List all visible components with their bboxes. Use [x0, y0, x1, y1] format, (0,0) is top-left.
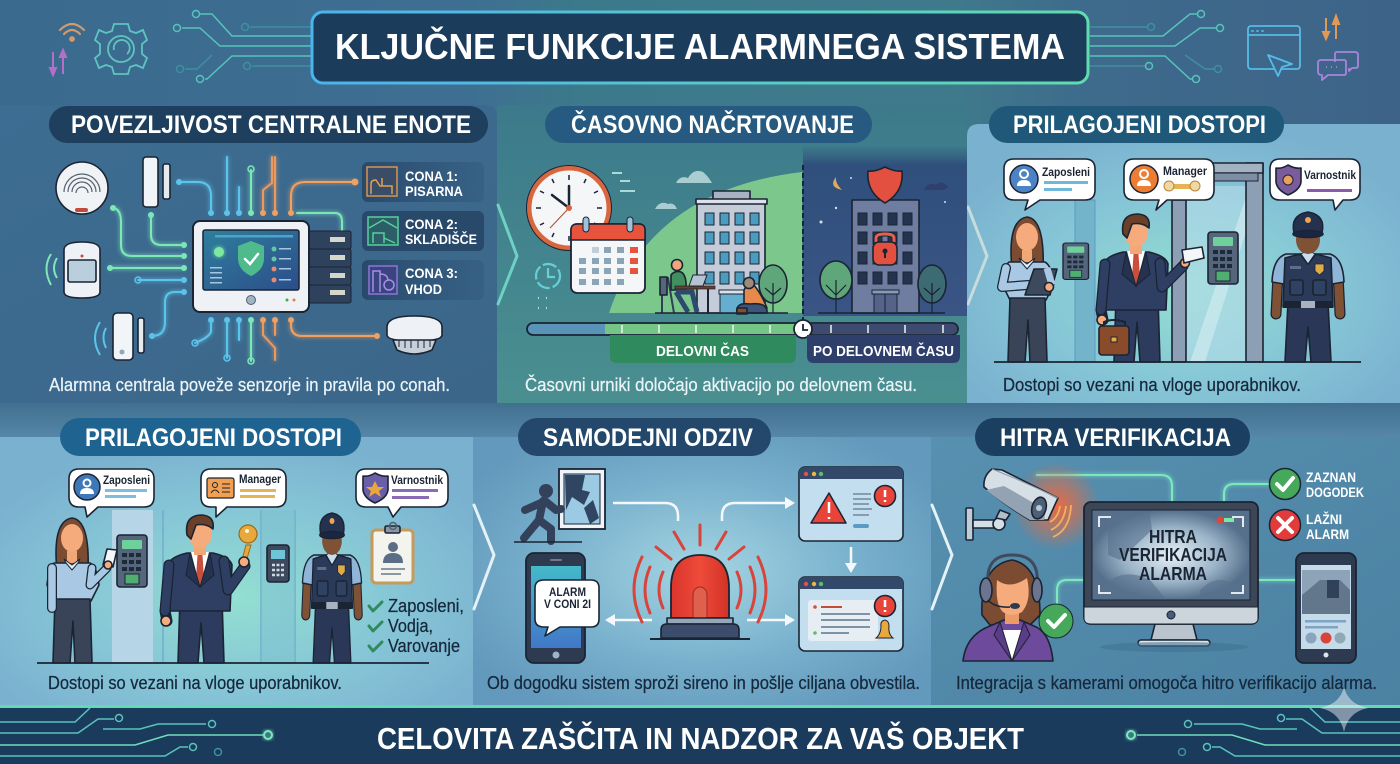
- icon: chat bubbles: [1318, 52, 1358, 80]
- bubble: guard: Varnostnik: [1304, 168, 1356, 182]
- panel: rapid verification background: [931, 437, 1400, 706]
- icon: motion sensor: [46, 242, 100, 298]
- title: KLJUČNE FUNKCIJE ALARMNEGA SISTEMA: [335, 25, 1065, 67]
- zone 2 label: CONA 2:: [405, 216, 458, 232]
- icon: ceiling smoke sensor: [387, 316, 442, 354]
- icon: seated person: [737, 278, 767, 314]
- bubble: guard second: Varnostnik: [391, 473, 443, 487]
- panel: connectivity of the central unit: [46, 106, 488, 395]
- timeline: [527, 323, 958, 335]
- panel: automatic response: [487, 418, 920, 693]
- icon: up and down arrows right: [1323, 16, 1339, 39]
- icon: detected event check: DOGODEK: [1306, 484, 1364, 500]
- label: working time: DELOVNI ČAS: [656, 342, 749, 360]
- icon: phone with message: V CONI 2I: [544, 599, 591, 611]
- zone 1 label: PISARNA: [405, 183, 463, 199]
- zone 3 label: CONA 3:: [405, 265, 458, 281]
- person: employee second: [47, 518, 117, 663]
- icon: monitor: ALARMA: [1139, 564, 1207, 584]
- bubble: manager: Manager: [1163, 164, 1207, 178]
- person: manager second: [161, 515, 257, 663]
- heading: scheduling: ČASOVNO NAČRTOVANJE: [571, 109, 854, 139]
- ground line: [37, 662, 429, 664]
- heading: rapid verification: [975, 418, 1250, 456]
- person: security guard: [1272, 212, 1344, 362]
- decorative clouds day: [612, 171, 712, 209]
- person: guard second: [302, 513, 362, 663]
- heading: custom access: [989, 106, 1284, 143]
- checklist: roles: Zaposleni,: [388, 596, 464, 616]
- icon: red shield: [868, 167, 902, 203]
- arrow: siren to notification: [747, 614, 795, 626]
- icon: burglar at window: [514, 469, 605, 542]
- connector lines: [1036, 475, 1297, 606]
- sensor wires: [110, 157, 377, 361]
- ground lines: [655, 312, 945, 314]
- panel: automatic response background: [473, 437, 931, 706]
- bubble: guard second: [356, 469, 448, 517]
- heading: custom access second: [60, 418, 361, 456]
- bubble: employee second: Zaposleni: [103, 473, 150, 487]
- arrow: alert to notification: [845, 547, 857, 573]
- zone 1 label: [362, 162, 484, 202]
- sparkle mark: [1320, 687, 1368, 732]
- heading: scheduling: [545, 106, 872, 143]
- icon: small timer: [536, 264, 560, 308]
- zone 3 label: VHOD: [405, 281, 442, 297]
- caption: Dostopi so vezani na vloge uporabnikov.: [1003, 375, 1301, 395]
- arrow: siren to phone: [605, 614, 652, 626]
- icon: keypad on gate: [1208, 232, 1238, 284]
- icon: detected event check: ZAZNAN: [1306, 469, 1356, 485]
- zone 2 label: SKLADIŠČE: [405, 230, 477, 247]
- icon: monitor: [1084, 502, 1258, 652]
- icon: up and down arrows left: [50, 50, 66, 75]
- heading: custom access: PRILAGOJENI DOSTOPI: [1013, 111, 1266, 139]
- caption: Časovni urniki določajo aktivacijo po delovnem času.: [525, 374, 917, 395]
- timeline handle: [794, 320, 812, 338]
- divider: [802, 165, 804, 320]
- icon: security camera: [966, 469, 1071, 540]
- caption: Integracija s kamerami omogoča hitro verifikacijo alarma.: [956, 673, 1377, 693]
- caption: Ob dogodku sistem sproži sireno in pošlje ciljana obvestila.: [487, 673, 920, 693]
- icon: phone camera feed: [1296, 553, 1356, 663]
- icon: keypad left: [117, 535, 147, 587]
- bubble: employee: Zaposleni: [1042, 165, 1090, 179]
- green day hill: [609, 172, 802, 313]
- header right circuit lines: [1090, 10, 1224, 82]
- bubble: manager: [1124, 159, 1214, 210]
- icon: padlock: [873, 234, 897, 265]
- row gap band: [0, 403, 1400, 439]
- heading: custom access second: PRILAGOJENI DOSTOPI: [85, 424, 342, 452]
- night sky details: [820, 177, 948, 224]
- wall band: [1075, 200, 1095, 362]
- icon: wifi: [60, 24, 84, 41]
- panel: custom access background: [967, 124, 1400, 403]
- icon: phone with message: ALARM: [549, 587, 586, 599]
- icon: server rack: [309, 231, 351, 303]
- icon: detected event check: [1270, 468, 1364, 500]
- icon: clock: [526, 166, 612, 250]
- bubble: employee: [1004, 159, 1095, 210]
- icon: false alarm cross: [1270, 510, 1349, 542]
- icon: browser cursor: [1248, 26, 1300, 76]
- footer left circuit: [0, 708, 272, 756]
- icon: smoke detector: [56, 162, 108, 214]
- title: [312, 12, 1088, 83]
- security gate: [1172, 163, 1263, 362]
- person: operator with headset: [963, 555, 1053, 661]
- icon: alert window: [799, 467, 903, 541]
- zone 1 label: CONA 1:: [405, 168, 458, 184]
- icon: worker at desk: [660, 260, 715, 313]
- icon: clipboard badge: [372, 522, 413, 583]
- panel: time scheduling: [525, 106, 967, 395]
- icon: phone with message: [526, 553, 599, 663]
- bubble: manager second: [201, 469, 286, 517]
- checklist: roles: Varovanje: [388, 636, 460, 656]
- footer band: [0, 705, 1400, 764]
- label: after hours: PO DELOVNEM ČASU: [813, 342, 954, 360]
- icon: monitor: VERIFIKACIJA: [1119, 545, 1227, 565]
- panel: custom access bottom: [37, 418, 464, 693]
- office building day: [696, 191, 767, 313]
- icon: calendar: [571, 217, 645, 293]
- zone 2 label: [362, 211, 484, 251]
- icon: door sensor top: [143, 157, 170, 207]
- bubble: guard: [1270, 159, 1360, 210]
- doors: [112, 510, 295, 663]
- bubble: employee second: [69, 469, 154, 517]
- panel: custom access row two background: [0, 437, 473, 706]
- label: after hours: [807, 335, 960, 363]
- heading: automatic response: SAMODEJNI ODZIV: [543, 424, 753, 452]
- icon: operator check: [1039, 604, 1073, 638]
- footer right circuit: [1127, 708, 1400, 756]
- checklist: roles: Vodja,: [388, 616, 433, 636]
- flow chevrons: [474, 205, 987, 609]
- icon: central control panel: [193, 221, 309, 312]
- icon: keypad on wall: [1063, 243, 1088, 279]
- icons: night trees: [820, 261, 946, 313]
- heading: automatic response: [518, 418, 771, 456]
- night building: [852, 200, 919, 313]
- icon: gear: [95, 24, 147, 74]
- caption: Alarmna centrala poveže senzorje in pravila po conah.: [49, 375, 450, 395]
- footer slogan: CELOVITA ZAŠČITA IN NADZOR ZA VAŠ OBJEKT: [377, 720, 1024, 756]
- checklist: roles: [369, 596, 464, 656]
- panel: scheduling background: [497, 105, 967, 403]
- bubble: manager second: Manager: [239, 472, 281, 486]
- icon: false alarm cross: ALARM: [1306, 526, 1349, 542]
- icon: door sensor bottom: [95, 313, 144, 360]
- night background: [803, 145, 967, 316]
- panel: custom access top: [989, 106, 1361, 395]
- arrow: event to siren: [613, 503, 678, 521]
- heading: rapid verification: HITRA VERIFIKACIJA: [1000, 424, 1231, 452]
- camera glow: [1012, 462, 1100, 550]
- caption: Dostopi so vezani na vloge uporabnikov.: [48, 673, 342, 693]
- zone 3 label: [362, 260, 484, 300]
- panel: connectivity background: [0, 105, 497, 403]
- person: employee: [1002, 217, 1057, 362]
- icon: tree day: [759, 265, 787, 313]
- heading: connectivity: [49, 106, 488, 143]
- arrow: siren to alert: [722, 497, 795, 521]
- label: working time: [610, 335, 796, 363]
- icon: red siren: [634, 525, 766, 639]
- icon: keypad right: [267, 545, 289, 582]
- person: manager: [1097, 214, 1204, 362]
- wire terminals: [107, 166, 380, 364]
- panel: rapid verification: [956, 418, 1377, 693]
- icon: notification window: [799, 577, 903, 651]
- header left circuit lines: [174, 10, 311, 82]
- heading: connectivity: POVEZLJIVOST CENTRALNE ENOTE: [71, 111, 471, 139]
- ground line: [994, 361, 1361, 363]
- icon: false alarm cross: LAŽNI: [1306, 510, 1342, 527]
- icon: monitor: HITRA: [1149, 527, 1197, 547]
